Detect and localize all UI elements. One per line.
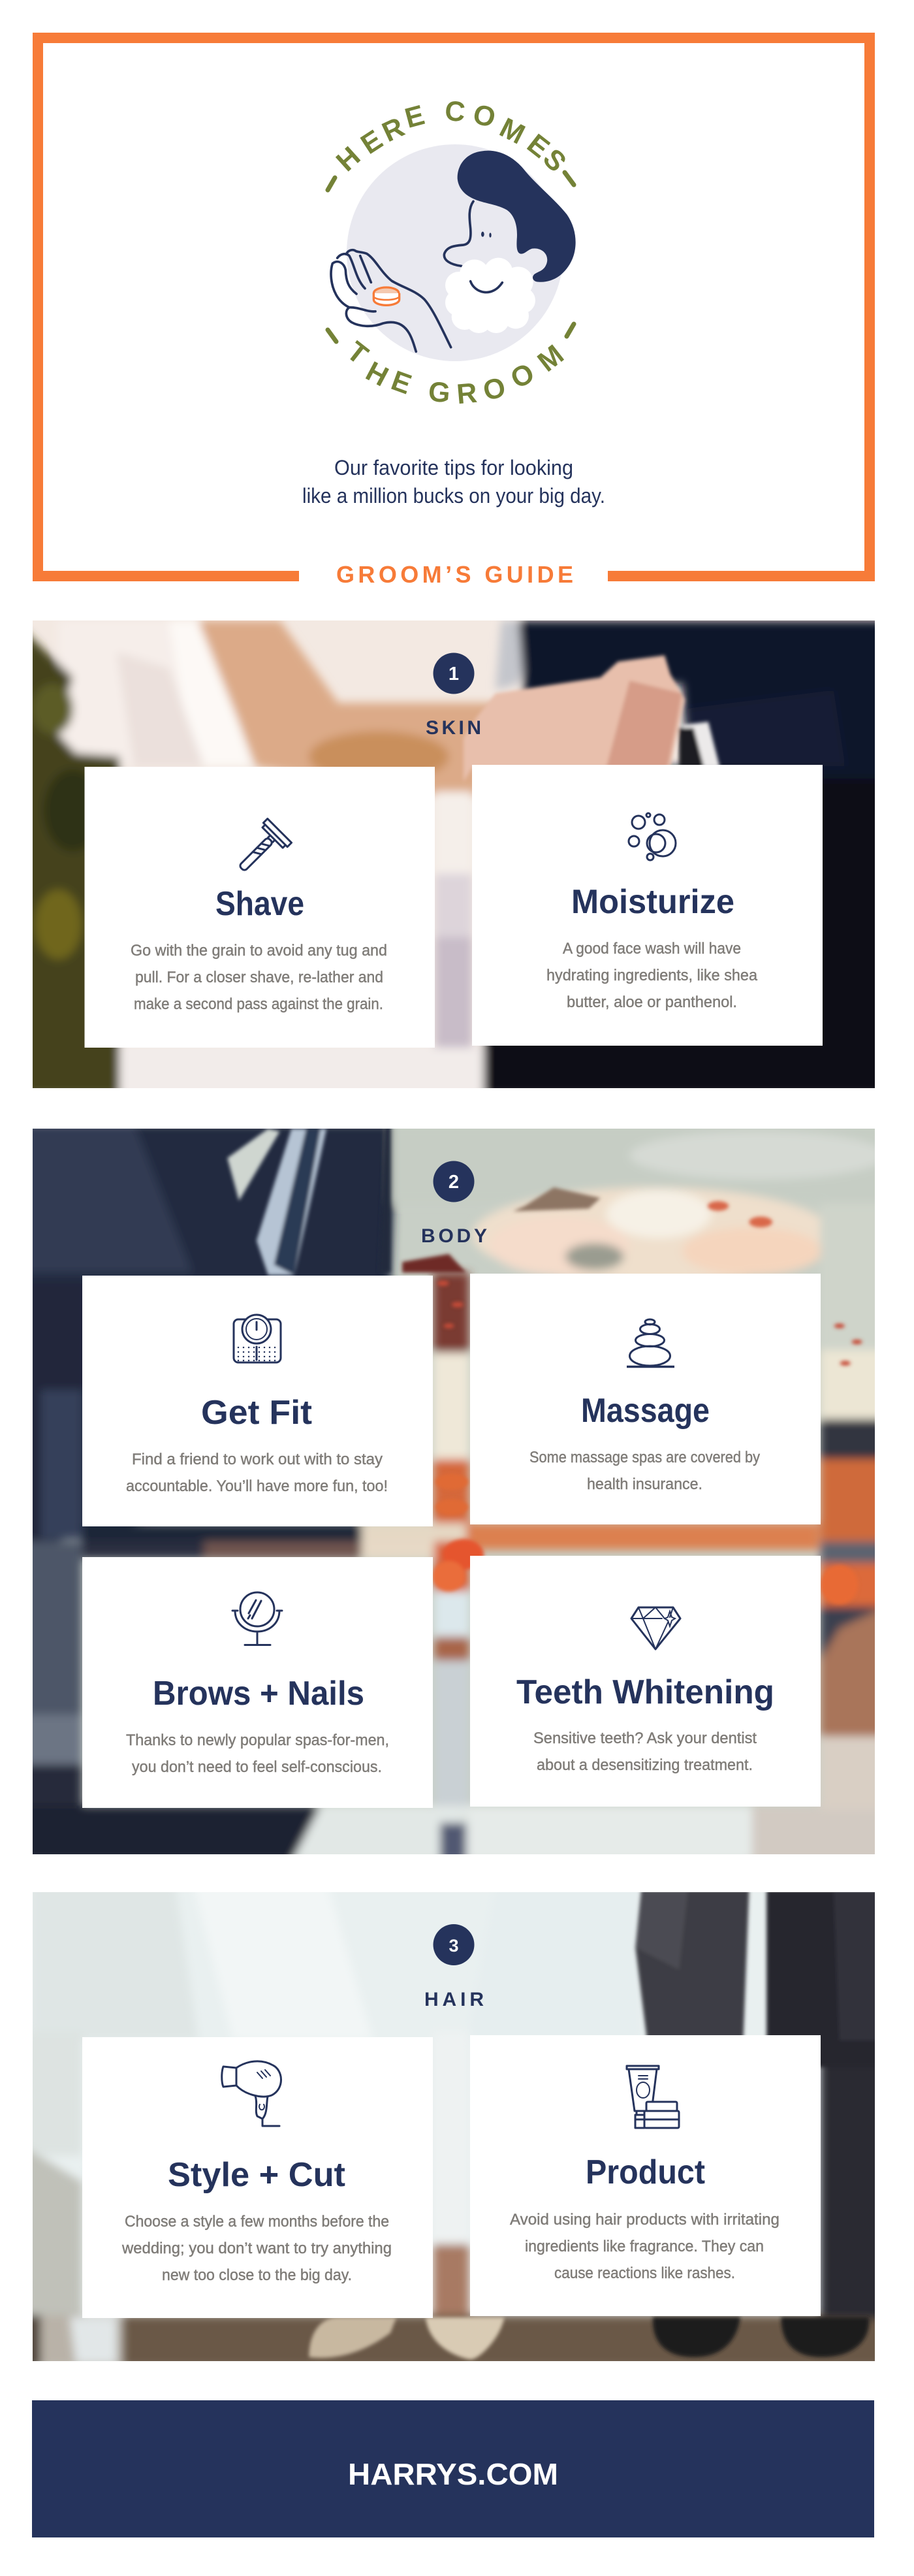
body text: moisturize: A good face wash will have [563,940,741,958]
body text: style + cut: new too close to the big day. [162,2266,352,2284]
icon: hair dryer [222,2061,281,2126]
panel: skin section [24,620,886,1095]
arc heading: here comes: S [537,143,573,178]
arc heading: here comes: E [355,124,388,161]
intro text: like a million bucks on your big day. [302,484,605,507]
illustration: groom with hand and ring [331,151,576,351]
arc heading: here comes: M [495,112,529,150]
card: shave [85,767,435,1048]
icon: stacked stones [627,1319,674,1366]
section number 3 [433,1924,474,1965]
icon: bubbles [629,813,676,860]
arc heading: the groom: O [506,357,539,395]
body text: teeth whitening: Sensitive teeth? Ask your dentist [533,1730,757,1747]
arc heading: the groom: T [341,336,374,371]
orange ring [373,287,400,305]
body text: massage [529,1449,760,1493]
body text: brows + nails [126,1731,389,1776]
icon: bathroom scale [234,1315,281,1362]
card: get fit [82,1276,433,1526]
intro text [302,456,605,507]
icon: razor [230,818,292,880]
body text: get fit [126,1451,388,1495]
hand [331,250,451,351]
body text: shave [131,942,387,1013]
section heading: hair: HAIR [424,1989,484,2010]
title: shave: Shave [215,885,304,923]
face line [444,201,473,266]
section number 3: 3 [449,1936,459,1956]
card: teeth whitening [470,1556,821,1807]
eyes [481,232,492,238]
body text: get fit: Find a friend to work out with to stay [132,1451,383,1468]
body text: moisturize: butter, aloe or panthenol. [567,993,737,1011]
section number 2: 2 [449,1172,459,1193]
title: moisturize: Moisturize [571,883,734,921]
foam beard [445,258,535,333]
title: massage: Massage [581,1392,710,1430]
arc heading: here comes [328,95,574,190]
arc heading: the groom [328,324,574,410]
card: massage [470,1274,821,1524]
card: moisturize [472,765,823,1046]
card: product [470,2035,821,2316]
icon: hair products [627,2066,679,2128]
icon: diamond [631,1607,680,1649]
grey circle [347,144,563,361]
title: product: Product [586,2153,705,2191]
arc heading: here comes: O [470,99,499,134]
body text: brows + nails: you don’t need to feel self-conscious. [132,1758,382,1776]
panel: header [38,38,870,588]
photo: dress and shoes [24,1881,898,2368]
body text: shave: pull. For a closer shave, re-lather and [135,969,383,986]
title: brows + nails: Brows + Nails [153,1675,364,1713]
section number 1 [433,653,474,694]
panel: body section [24,1123,914,1862]
footer link text: HARRYS.COM [348,2457,558,2491]
arc heading: the groom: M [532,339,570,378]
body text: style + cut: Choose a style a few months before the [125,2213,389,2230]
body text: product: cause reactions like rashes. [554,2264,735,2282]
arc heading: here comes: R [377,112,409,148]
body text: teeth whitening: about a desensitizing treatment. [537,1756,753,1774]
body text: product: Avoid using hair products with irritating [510,2211,780,2229]
arc heading: the groom: E [387,364,415,400]
intro text: Our favorite tips for looking [334,456,573,479]
card: style + cut [82,2037,433,2318]
body text: brows + nails: Thanks to newly popular spas-for-men, [126,1731,389,1749]
body text: product: ingredients like fragrance. They can [525,2238,764,2255]
smile [471,282,502,293]
arc heading: here comes: E [521,128,555,165]
panel: hair section [24,1881,898,2368]
section number 1: 1 [449,664,459,684]
body text: moisturize: hydrating ingredients, like shea [546,967,758,984]
heading: groom's guide: GROOM’S GUIDE [336,561,573,588]
arc heading: the groom: R [456,378,479,410]
arc heading: here comes: C [443,95,466,128]
arc heading: here comes: E [402,99,428,135]
body text: style + cut: wedding; you don’t want to try anything [121,2240,392,2257]
section number 2 [433,1161,474,1202]
section heading: skin: SKIN [426,717,481,739]
body text: style + cut [121,2213,392,2284]
photo: holding hands [24,620,886,1095]
arc heading: the groom: O [480,372,509,407]
title: get fit: Get Fit [201,1394,312,1432]
card: brows + nails [82,1557,433,1808]
hair [458,151,576,282]
body text: shave: Go with the grain to avoid any tug and [131,942,387,959]
body text: shave: make a second pass against the grain. [134,995,383,1013]
icon: mirror [232,1592,282,1645]
body text: massage: Some massage spas are covered by [529,1449,760,1466]
section heading: body: BODY [421,1225,487,1247]
body text: massage: health insurance. [587,1475,702,1493]
title: style + cut: Style + Cut [168,2156,345,2194]
body text: teeth whitening [533,1730,757,1774]
footer [32,2400,874,2537]
arc heading: here comes: H [330,141,366,178]
body text: product [510,2211,780,2282]
body text: get fit: accountable. You’ll have more fun, too! [126,1477,388,1495]
body text: moisturize [546,940,758,1011]
badge: here comes the groom [328,95,576,410]
arc heading: the groom: H [361,355,394,393]
orange frame [38,38,870,576]
arc heading: the groom: G [427,376,452,409]
title: teeth whitening: Teeth Whitening [516,1673,774,1711]
photo: suit and bouquet [24,1123,914,1862]
